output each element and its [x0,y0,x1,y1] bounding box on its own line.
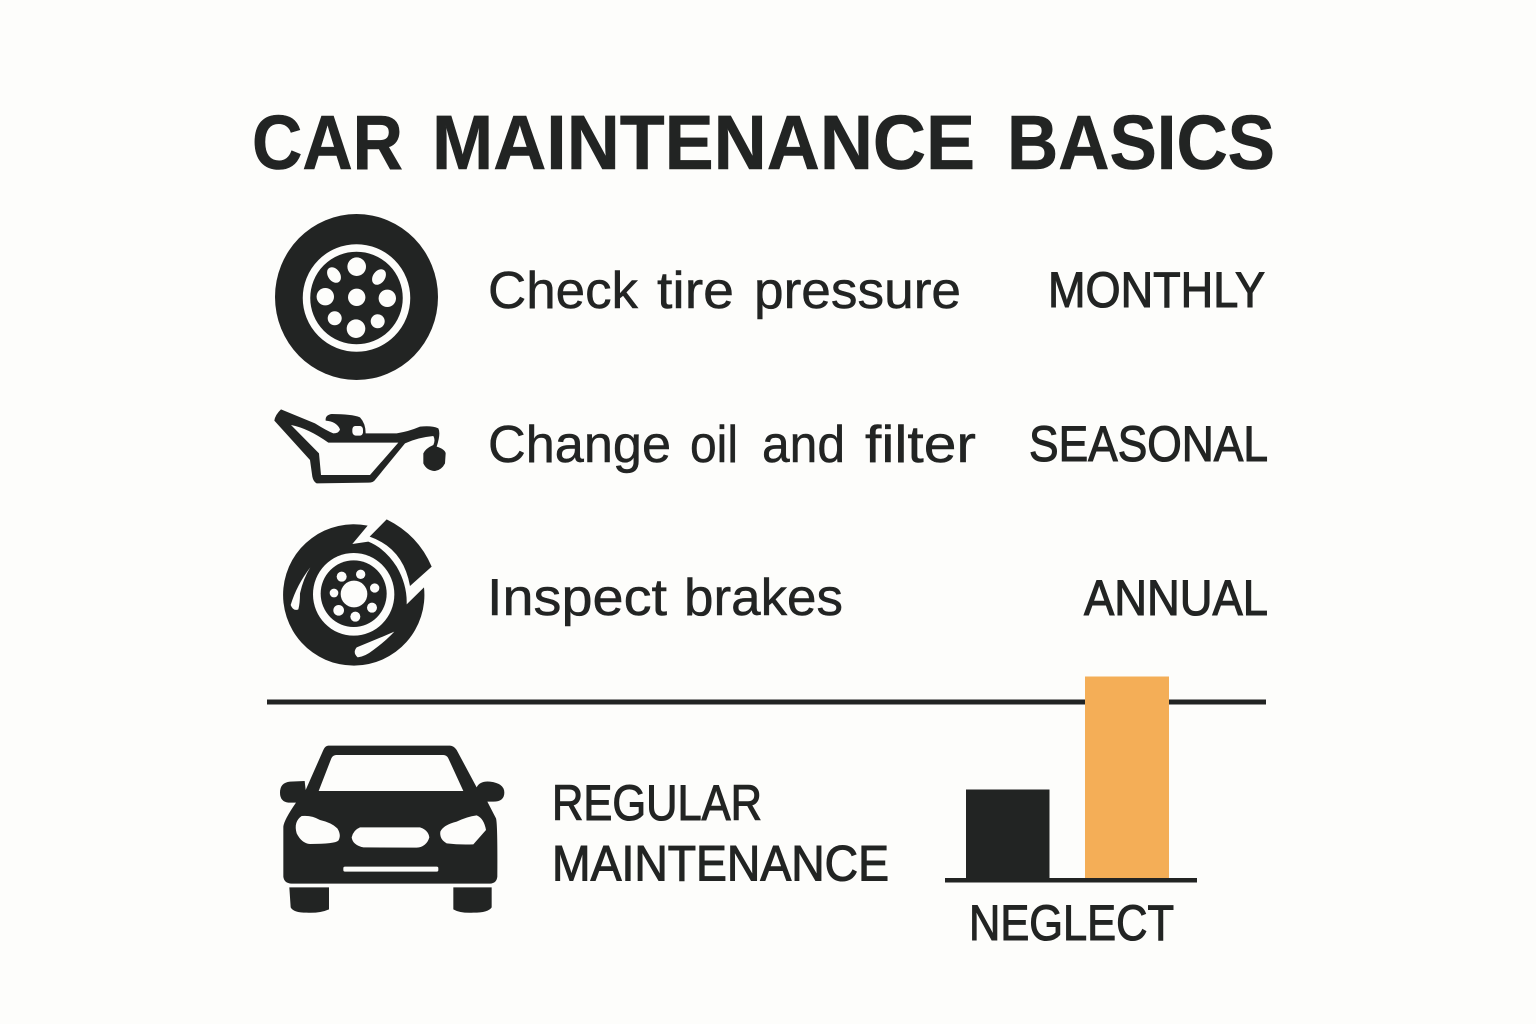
text: regular maintenance [552,775,889,892]
text: change oil and filter: oil [690,416,738,474]
text: check tire pressure: Check [488,262,639,320]
text: regular maintenance: MAINTENANCE [552,836,889,892]
text: check tire pressure: tire [657,262,734,320]
text: inspect brakes [487,569,843,627]
title: MAINTENANCE [432,100,975,186]
label: neglect: NEGLECT [969,895,1174,951]
title: BASICS [1007,100,1275,186]
title [252,100,1275,186]
icon: oil can [274,409,446,483]
text: regular maintenance: REGULAR [552,775,762,831]
title: CAR [252,100,403,186]
bar chart: regular vs neglect [945,676,1197,951]
text: seasonal: SEASONAL [1029,416,1268,472]
divider line [267,700,1266,704]
text: change oil and filter: and [762,416,845,474]
text: monthly: MONTHLY [1048,262,1265,318]
bar: regular [966,790,1050,880]
bar: neglect [1085,676,1169,878]
text: inspect brakes: Inspect [487,569,668,627]
icon: tire [275,214,438,380]
icon: brake disc [283,519,432,666]
text: change oil and filter: Change [488,416,671,474]
text: check tire pressure: pressure [754,262,961,320]
text: change oil and filter [488,416,976,474]
text: check tire pressure [488,262,961,320]
text: annual: ANNUAL [1084,570,1268,626]
text: change oil and filter: filter [865,416,976,474]
text: inspect brakes: brakes [684,569,843,627]
icon: car front [280,746,504,913]
chart baseline [945,878,1197,882]
